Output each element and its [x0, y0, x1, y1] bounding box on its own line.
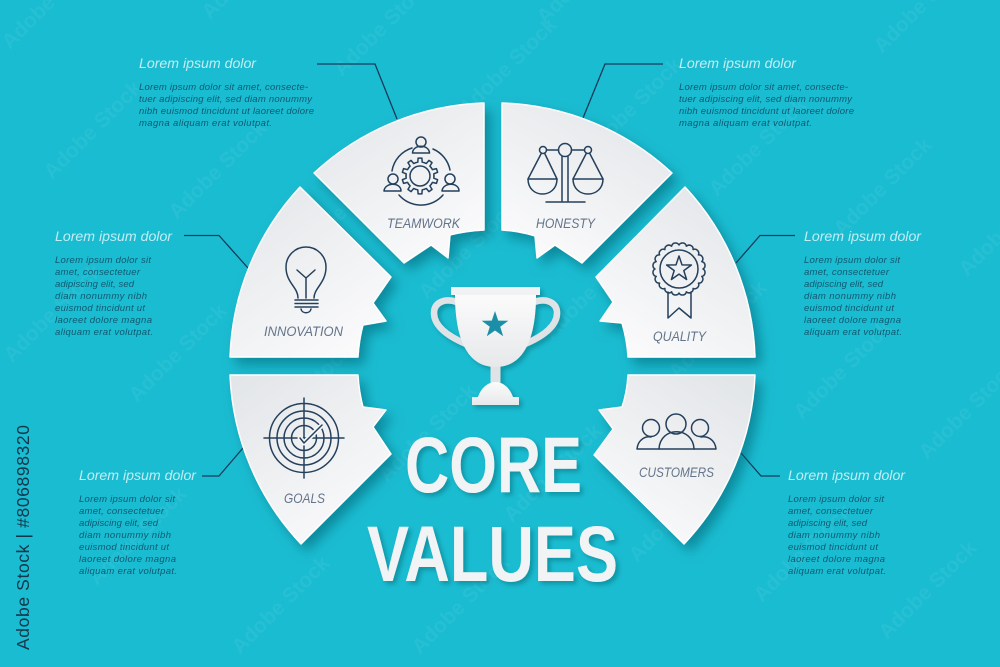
callout body: diam nonummy nibh — [804, 291, 896, 302]
leader line: goals — [202, 448, 243, 476]
callout body: laoreet dolore magna — [788, 554, 885, 565]
icon: target with check — [264, 398, 344, 478]
callout: middle left — [55, 228, 173, 338]
watermark pattern: Adobe Stock — [39, 76, 147, 184]
watermark pattern: Adobe Stock — [249, 339, 357, 447]
callout heading: Lorem ipsum dolor — [79, 467, 197, 483]
callout heading: Lorem ipsum dolor — [139, 55, 257, 71]
watermark pattern: Adobe Stock — [414, 196, 522, 304]
callout body: laoreet dolore magna — [55, 315, 152, 326]
callout body: nibh euismod tincidunt ut laoreet dolore — [139, 106, 314, 117]
callout body: laoreet dolore magna — [79, 554, 176, 565]
callout body: Lorem ipsum dolor sit — [55, 255, 151, 266]
callout heading: Lorem ipsum dolor — [804, 228, 922, 244]
panel: quality — [596, 187, 755, 357]
innovation segment shape — [230, 187, 391, 357]
watermark pattern: Adobe Stock — [874, 536, 982, 644]
goals segment shape — [230, 375, 391, 544]
label: honesty: HONESTY — [536, 215, 596, 231]
callout body: diam nonummy nibh — [79, 530, 171, 541]
callout body: diam nonummy nibh — [55, 291, 147, 302]
stock id vertical text: Adobe Stock | #806898320 — [13, 425, 33, 650]
callout body: adipiscing elit, sed — [55, 279, 135, 290]
watermark pattern: Adobe Stock — [704, 93, 812, 201]
callout body: aliquam erat volutpat. — [788, 566, 886, 577]
label: teamwork: TEAMWORK — [387, 215, 461, 231]
watermark pattern: Adobe Stock — [829, 133, 937, 241]
callout body — [55, 255, 153, 338]
callout body: Lorem ipsum dolor sit amet, consecte- — [679, 82, 848, 93]
callout: middle right — [804, 228, 922, 338]
leader line: quality — [736, 236, 795, 263]
callout body — [139, 82, 314, 129]
callout heading: Lorem ipsum dolor — [55, 228, 173, 244]
callout heading: Lorem ipsum dolor — [679, 55, 797, 71]
trophy stem — [490, 365, 500, 385]
callout: top left — [139, 55, 314, 129]
callout body: magna aliquam erat volutpat. — [679, 118, 812, 129]
callout heading: Lorem ipsum dolor — [788, 467, 906, 483]
label: innovation: INNOVATION — [264, 323, 344, 339]
callout body: Lorem ipsum dolor sit amet, consecte- — [139, 82, 308, 93]
leader line: innovation — [184, 236, 248, 268]
callout body — [679, 82, 854, 129]
trophy rim — [451, 287, 540, 295]
label: quality: QUALITY — [653, 328, 707, 344]
callout body: adipiscing elit, sed — [804, 279, 884, 290]
watermark pattern: Adobe Stock — [454, 13, 562, 121]
callout body: adipiscing elit, sed — [79, 518, 159, 529]
title: core values — [367, 420, 618, 598]
trophy base — [472, 382, 519, 405]
leader line: teamwork — [317, 64, 397, 119]
callout body: euismod tincidunt ut — [79, 542, 169, 553]
watermark pattern: Adobe Stock — [124, 299, 232, 407]
callout body: amet, consectetuer — [788, 506, 874, 517]
watermark pattern: Adobe Stock — [579, 53, 687, 161]
trophy — [434, 287, 557, 405]
callout body — [804, 255, 902, 338]
callout body: euismod tincidunt ut — [804, 303, 894, 314]
callout body — [788, 494, 886, 577]
panel: innovation — [230, 187, 391, 357]
callout body: amet, consectetuer — [79, 506, 165, 517]
icon: teamwork gear and people — [384, 137, 459, 205]
watermark pattern: Adobe Stock — [0, 259, 107, 367]
callout body: Lorem ipsum dolor sit — [79, 494, 175, 505]
title: core values: VALUES — [367, 509, 618, 598]
callout body: tuer adipiscing elit, sed diam nonummy — [679, 94, 853, 105]
callout body: amet, consectetuer — [55, 267, 141, 278]
callout body: euismod tincidunt ut — [55, 303, 145, 314]
callout body: amet, consectetuer — [804, 267, 890, 278]
callout body: adipiscing elit, sed — [788, 518, 868, 529]
icon: three people — [637, 414, 716, 449]
icon: light bulb — [286, 247, 326, 313]
trophy cup — [455, 295, 536, 367]
callout body: aliquam erat volutpat. — [804, 327, 902, 338]
callout body — [79, 494, 177, 577]
callout body: Lorem ipsum dolor sit — [804, 255, 900, 266]
customers segment shape — [594, 375, 755, 544]
callout body: Lorem ipsum dolor sit — [788, 494, 884, 505]
watermark pattern: Adobe Stock — [499, 419, 607, 527]
callout: bottom left — [79, 467, 197, 577]
label: customers: CUSTOMERS — [639, 464, 715, 480]
leader line: honesty — [583, 64, 663, 118]
callout: bottom right — [788, 467, 906, 577]
watermark pattern: Adobe Stock — [227, 551, 335, 659]
callout body: diam nonummy nibh — [788, 530, 880, 541]
label: goals: GOALS — [284, 490, 326, 506]
icon: star on trophy — [482, 311, 508, 336]
watermark pattern: Adobe Stock — [84, 482, 192, 590]
callout body: aliquam erat volutpat. — [79, 566, 177, 577]
watermark pattern: Adobe Stock — [624, 459, 732, 567]
quality segment shape — [596, 187, 755, 357]
watermark pattern: Adobe Stock — [374, 379, 482, 487]
callout body: magna aliquam erat volutpat. — [139, 118, 272, 129]
teamwork segment shape — [314, 103, 484, 263]
callout body: laoreet dolore magna — [804, 315, 901, 326]
panel: customers — [594, 375, 755, 544]
leader line: customers — [741, 453, 780, 476]
watermark pattern: Adobe Stock — [407, 551, 515, 659]
callout body: nibh euismod tincidunt ut laoreet dolore — [679, 106, 854, 117]
honesty segment shape — [502, 103, 672, 263]
panel: teamwork — [314, 103, 484, 263]
watermark pattern: Adobe Stock — [539, 236, 647, 344]
callout: top right — [679, 55, 854, 129]
watermark pattern: Adobe Stock — [164, 116, 272, 224]
callout body: euismod tincidunt ut — [788, 542, 878, 553]
watermark pattern: Adobe Stock — [664, 276, 772, 384]
icon: award badge — [653, 243, 705, 318]
watermark pattern: Adobe Stock — [289, 156, 397, 264]
callout body: aliquam erat volutpat. — [55, 327, 153, 338]
icon: scales — [528, 144, 603, 202]
title: core values: CORE — [405, 420, 582, 509]
callout body: tuer adipiscing elit, sed diam nonummy — [139, 94, 313, 105]
trophy handles — [434, 300, 557, 344]
panel: goals — [230, 375, 391, 544]
watermark pattern: Adobe Stock — [749, 499, 857, 607]
watermark pattern: Adobe Stock — [789, 316, 897, 424]
panel: honesty — [502, 103, 672, 263]
